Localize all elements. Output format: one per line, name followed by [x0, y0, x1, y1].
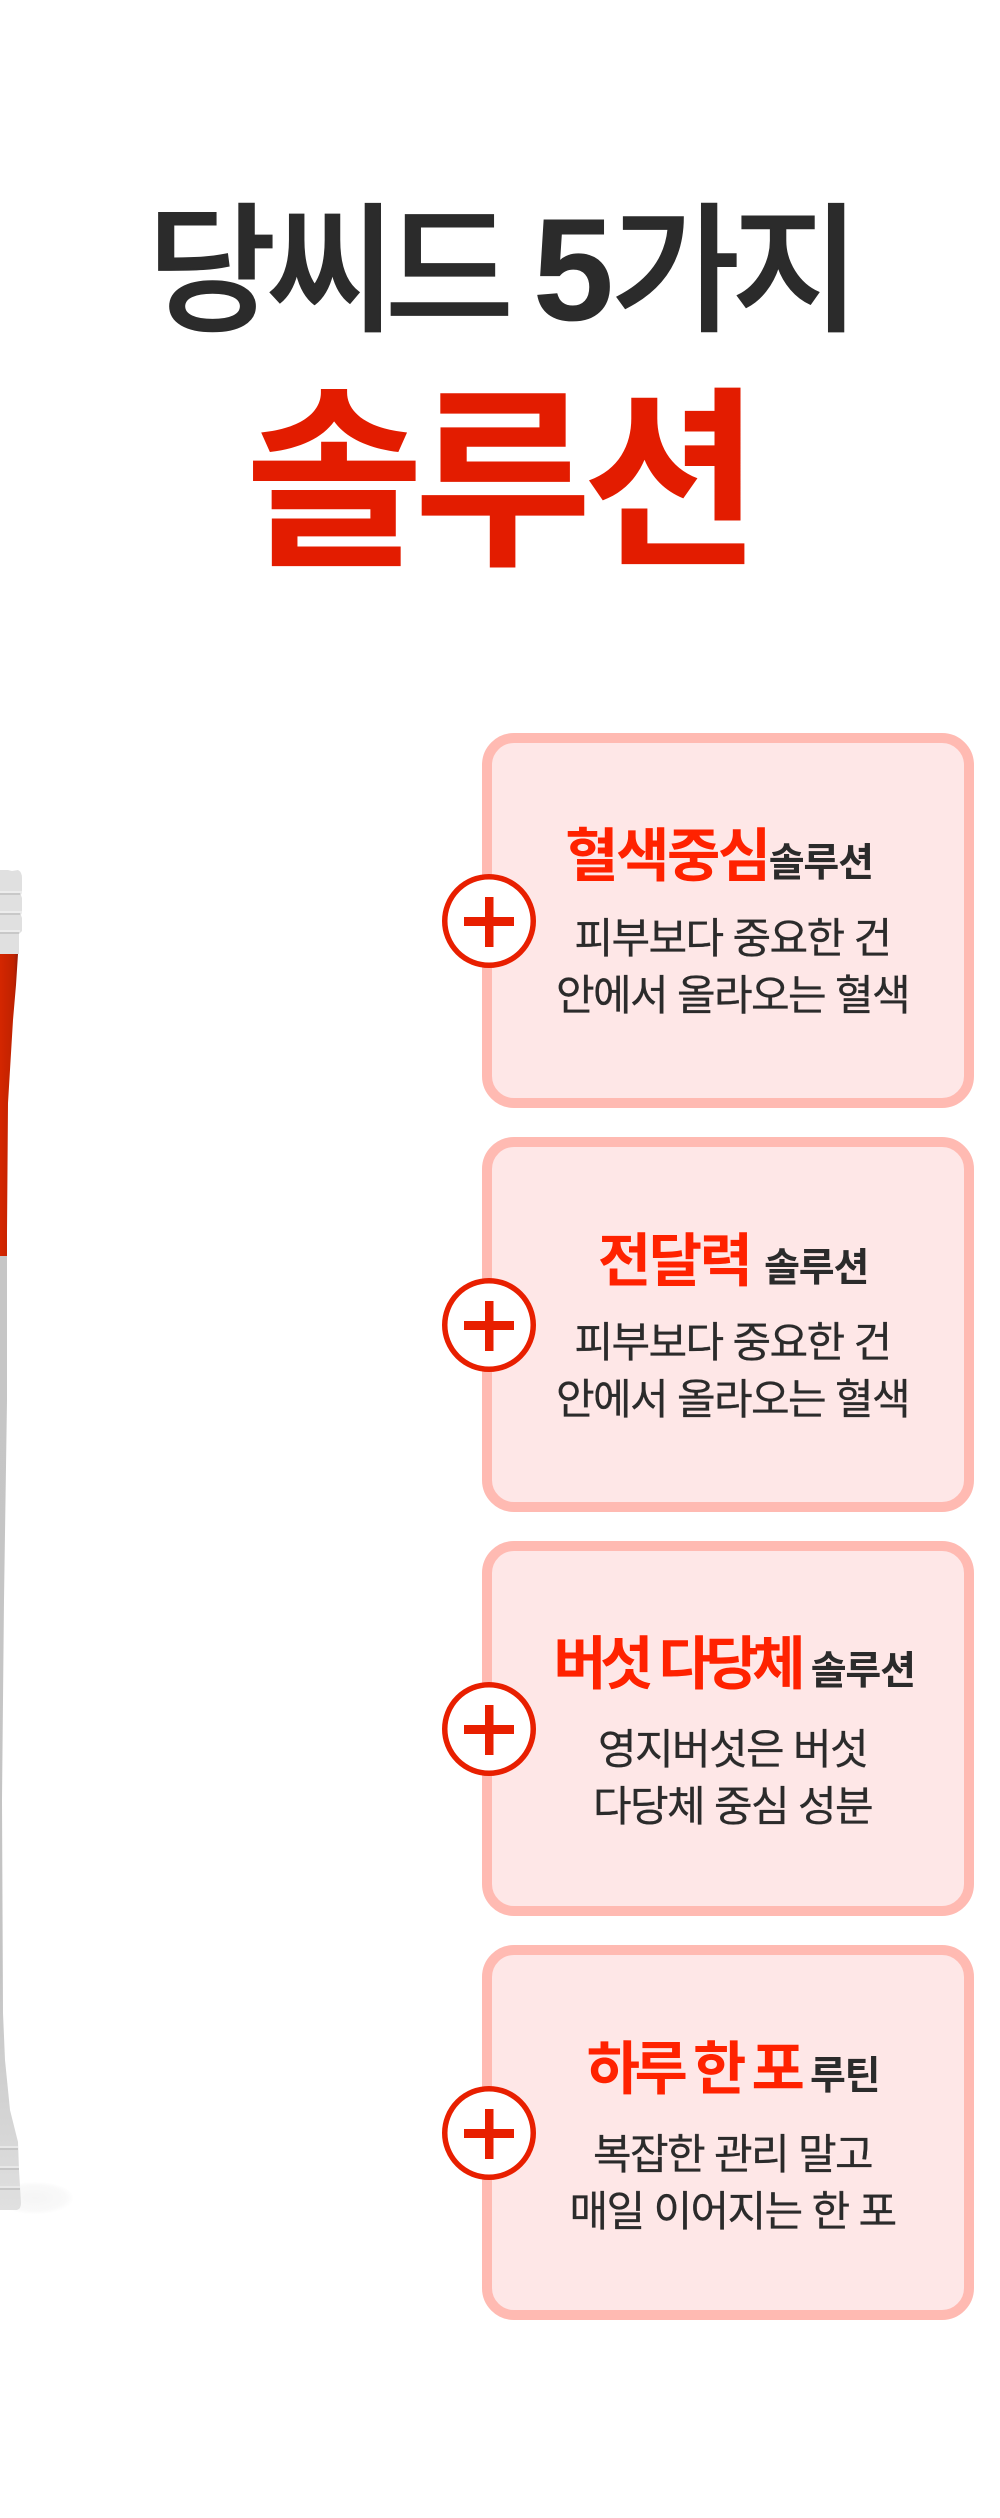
heading: 하루 한 포 루틴: 하루 한 포 루틴	[587, 2037, 879, 2102]
title: 당씨드 5가지: 당씨드 5가지	[147, 188, 853, 351]
text: 피부보다 중요한 건	[556, 915, 909, 1019]
panel: 버섯 다당체 솔루션	[482, 1541, 974, 1916]
text: 피부보다 중요한 건: 안에서 올라오는 혈색	[556, 972, 909, 1019]
panel: 전달력 솔루션	[482, 1137, 974, 1512]
text: 영지버섯은 버섯: 영지버섯은 버섯	[598, 1726, 867, 1773]
heading: 혈색중심 솔루션: 혈색중심솔루션	[565, 824, 873, 889]
panel: 혈색중심 솔루션	[482, 733, 974, 1108]
icon: plus	[442, 1278, 536, 1372]
panel: 하루 한 포 루틴	[482, 1945, 974, 2320]
icon: plus	[442, 874, 536, 968]
pouch body	[0, 1256, 21, 2210]
text: 영지버섯은 버섯: 다당체 중심 성분	[593, 1783, 872, 1830]
shadow: pouch floor shadow	[0, 2182, 73, 2214]
heading: 버섯 다당체 솔루션: 버섯 다당체 솔루션	[553, 1632, 915, 1697]
pouch top cap	[0, 870, 22, 954]
icon: plus	[442, 2086, 536, 2180]
text: 피부보다 중요한 건	[556, 1319, 909, 1423]
text: 피부보다 중요한 건: 안에서 올라오는 혈색	[556, 1376, 909, 1423]
icon: plus	[442, 1682, 536, 1776]
text: 영지버섯은 버섯	[593, 1726, 872, 1830]
text: 복잡한 관리 말고: 복잡한 관리 말고	[593, 2131, 872, 2178]
title: 솔루션: 솔루션	[245, 375, 751, 592]
product image: cropped stick pouch	[0, 870, 50, 2210]
heading: 전달력 솔루션: 전달력 솔루션	[598, 1229, 868, 1294]
pouch red band	[0, 954, 18, 1256]
text: 피부보다 중요한 건: 피부보다 중요한 건	[575, 915, 890, 962]
text: 피부보다 중요한 건: 피부보다 중요한 건	[575, 1319, 890, 1366]
text: 복잡한 관리 말고	[570, 2131, 896, 2235]
text: 복잡한 관리 말고: 매일 이어지는 한 포	[570, 2188, 895, 2235]
